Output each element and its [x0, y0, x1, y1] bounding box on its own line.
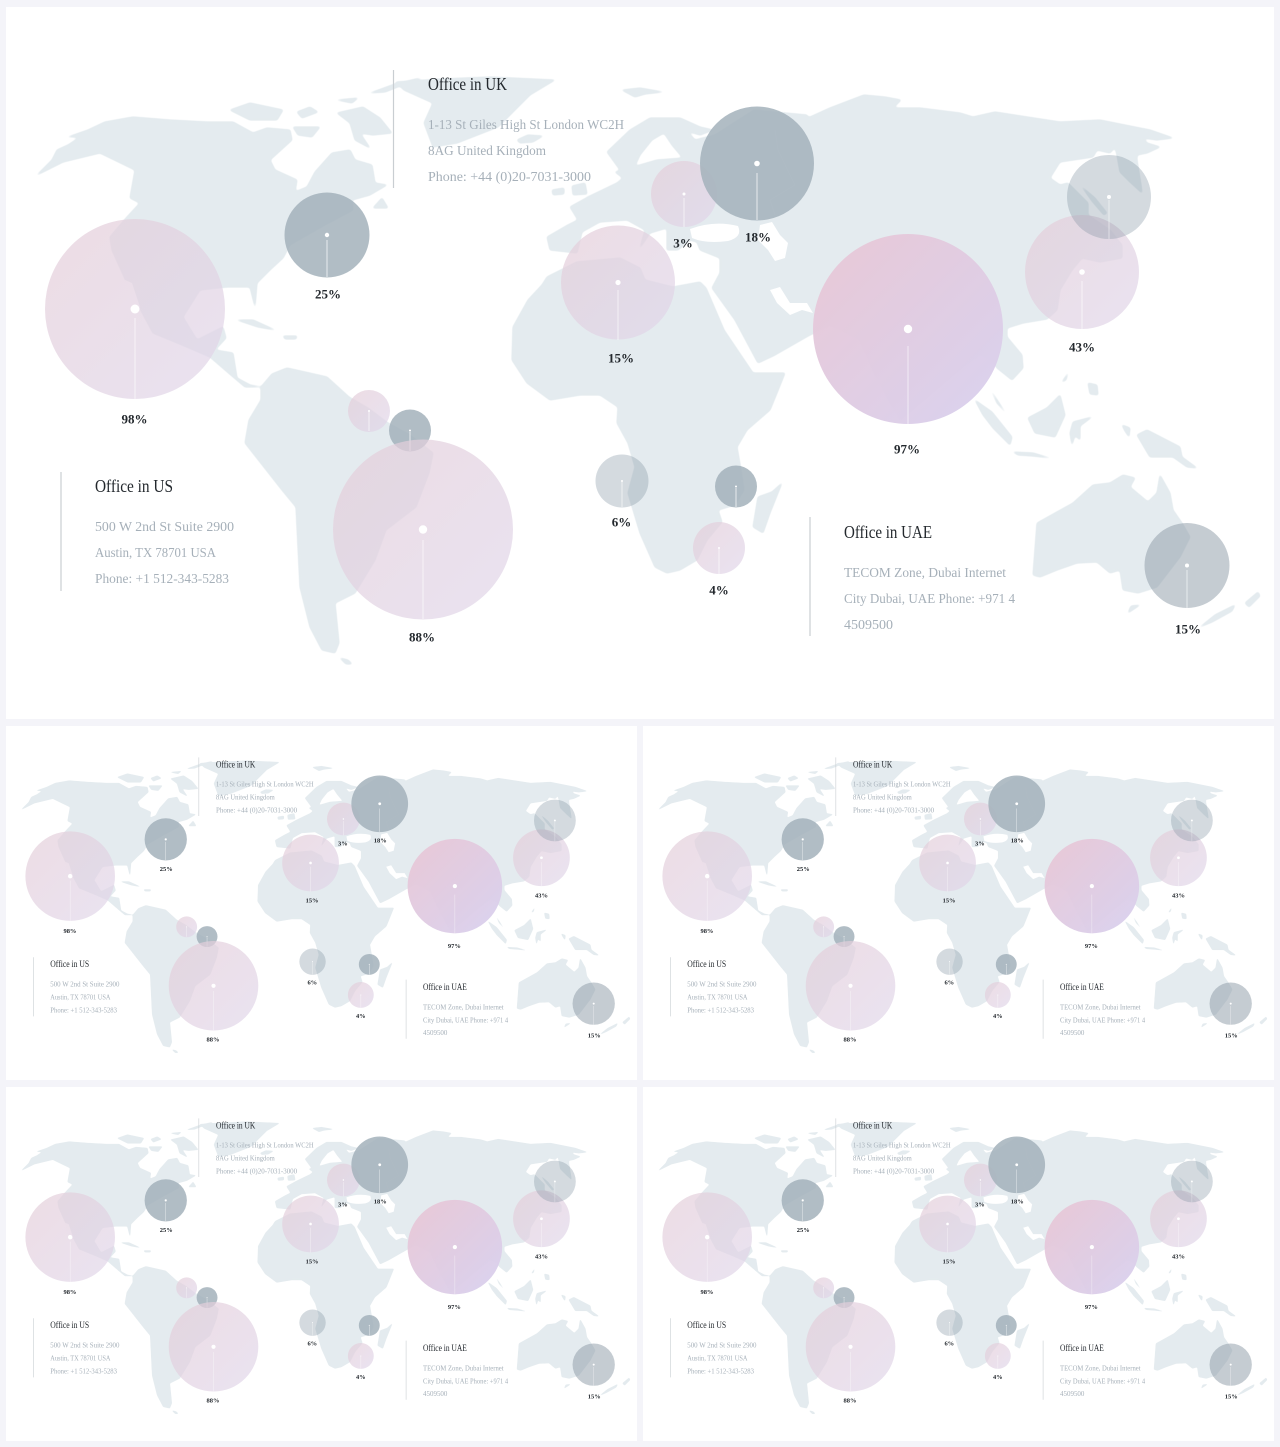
- thumbnail office block: UK: [199, 1118, 314, 1177]
- label 3%: 3%: [673, 236, 693, 250]
- thumbnail office block: UAE: 4509500: [1060, 1029, 1085, 1037]
- thumbnail office block: US: Office in US: [687, 1320, 726, 1330]
- thumbnail percentage labels: 97%: [1085, 943, 1098, 950]
- bubbles group: [45, 106, 1230, 620]
- thumbnail map: [658, 1122, 1267, 1414]
- bubble: 15% Africa north: [561, 226, 675, 340]
- bubble: 6%: [596, 454, 648, 508]
- thumbnail bubbles: [25, 775, 615, 1031]
- thumbnail office block: US: 500 W 2nd St Suite 2900: [687, 1342, 757, 1350]
- office block: US: Austin, TX 78701 USA: [95, 546, 217, 561]
- thumbnail percentage labels: [63, 838, 601, 1043]
- thumbnail office block: US: Phone: +1 512-343-5283: [687, 1367, 754, 1375]
- office block: US: Phone: +1 512-343-5283: [95, 572, 229, 587]
- thumbnail office block: US: Austin, TX 78701 USA: [50, 993, 111, 1001]
- thumbnail percentage labels: 98%: [700, 1289, 713, 1296]
- thumbnail office block: UAE: [1043, 1341, 1146, 1400]
- label 97%: 97%: [894, 442, 920, 456]
- thumbnail percentage labels: 15%: [306, 898, 319, 905]
- label 4%: 4%: [709, 582, 729, 598]
- thumbnail percentage labels: 3%: [338, 1202, 348, 1209]
- thumbnail percentage labels: 6%: [307, 1340, 317, 1347]
- thumbnail percentage labels: 88%: [207, 1397, 219, 1404]
- office block: UAE: [810, 517, 1015, 636]
- thumbnail office block: UAE: Office in UAE: [423, 982, 467, 992]
- label 88%: 88%: [409, 630, 435, 644]
- thumbnail office block: UAE: 4509500: [423, 1029, 448, 1037]
- thumbnail office block: UK: 8AG United Kingdom: [216, 1155, 275, 1163]
- panel: thumbnail bottom right: [643, 1087, 1274, 1441]
- panel: thumbnail bottom left: [6, 1087, 637, 1441]
- office block: UK: 8AG United Kingdom: [428, 144, 546, 159]
- office block: US: 500 W 2nd St Suite 2900: [95, 520, 234, 535]
- thumbnail percentage labels: [63, 1199, 601, 1404]
- thumbnail office block: US: Office in US: [50, 959, 89, 969]
- thumbnail office block: UK: Phone: +44 (0)20-7031-3000: [216, 807, 298, 815]
- thumbnail office block: UAE: Office in UAE: [1060, 982, 1104, 992]
- percentage labels: [122, 230, 1201, 644]
- thumbnail percentage labels: 6%: [307, 979, 317, 986]
- thumbnail office block: UK: Office in UK: [853, 1120, 893, 1130]
- thumbnail office block: US: Office in US: [687, 959, 726, 969]
- thumbnail percentage labels: 18%: [1011, 1199, 1024, 1206]
- thumbnail percentage labels: 88%: [844, 1397, 856, 1404]
- thumbnail content: [658, 757, 1267, 1053]
- thumbnail map: [658, 761, 1267, 1053]
- bubble: 43%: [1025, 215, 1139, 329]
- world map: [37, 77, 1260, 664]
- thumbnail percentage labels: 25%: [160, 866, 173, 873]
- thumbnail percentage labels: [700, 1199, 1238, 1404]
- thumbnail office block: UK: [836, 757, 951, 816]
- thumbnail percentage labels: 97%: [1085, 1304, 1098, 1311]
- thumbnail percentage labels: 43%: [1172, 892, 1185, 899]
- thumbnail percentage labels: 15%: [1225, 1032, 1238, 1039]
- bubble: east Asia grey: [1067, 155, 1151, 239]
- thumbnail percentage labels: 3%: [975, 841, 985, 848]
- thumbnail office block: UK: Office in UK: [853, 759, 893, 769]
- thumbnail office block: UK: Phone: +44 (0)20-7031-3000: [853, 807, 935, 815]
- thumbnail percentage labels: 18%: [374, 838, 387, 845]
- thumbnail office block: UK: Office in UK: [216, 759, 256, 769]
- thumbnail percentage labels: 98%: [63, 1289, 76, 1296]
- thumbnail office block: UK: 1-13 St Giles High St London WC2H: [853, 1142, 951, 1150]
- thumbnail percentage labels: 88%: [207, 1036, 219, 1043]
- panel: thumbnail top right: [643, 726, 1274, 1080]
- thumbnail office block: UAE: City Dubai, UAE Phone: +971 4: [423, 1016, 509, 1024]
- thumbnail office block: US: [670, 957, 757, 1016]
- bubble: small grey South America: [389, 410, 431, 452]
- thumbnail percentage labels: 18%: [1011, 838, 1024, 845]
- thumbnail percentage labels: 3%: [338, 841, 348, 848]
- thumbnail map: [21, 761, 630, 1053]
- thumbnail office block: UAE: [406, 1341, 509, 1400]
- thumbnail office block: UK: 8AG United Kingdom: [853, 1155, 912, 1163]
- thumbnail office block: US: 500 W 2nd St Suite 2900: [50, 981, 120, 989]
- office block: UAE: City Dubai, UAE Phone: +971 4: [844, 592, 1015, 607]
- thumbnail office block: US: 500 W 2nd St Suite 2900: [687, 981, 757, 989]
- thumbnail bubbles: [662, 1136, 1252, 1392]
- thumbnail percentage labels: 15%: [943, 898, 956, 905]
- office block: UK: Phone: +44 (0)20-7031-3000: [428, 170, 591, 185]
- thumbnail office block: UAE: TECOM Zone, Dubai Internet: [1060, 1364, 1141, 1372]
- thumbnail office block: UAE: City Dubai, UAE Phone: +971 4: [423, 1377, 509, 1385]
- bubble: 97%: [813, 234, 1003, 424]
- thumbnail office block: US: Austin, TX 78701 USA: [687, 1354, 748, 1362]
- office block: US: Office in US: [95, 476, 173, 496]
- thumbnail percentage labels: 98%: [63, 928, 76, 935]
- bubble: 3%: [651, 161, 717, 227]
- thumbnail percentage labels: 18%: [374, 1199, 387, 1206]
- thumbnail office block: UK: 1-13 St Giles High St London WC2H: [853, 781, 951, 789]
- thumbnail office block: UAE: Office in UAE: [423, 1343, 467, 1353]
- thumbnail content: [658, 1118, 1267, 1414]
- thumbnail office block: UK: Phone: +44 (0)20-7031-3000: [853, 1168, 935, 1176]
- panel: thumbnail top left: [6, 726, 637, 1080]
- thumbnail office block: UK: [199, 757, 314, 816]
- bubble: small grey Africa east: [715, 466, 757, 508]
- thumbnail percentage labels: 15%: [588, 1393, 601, 1400]
- office block: UAE: 4509500: [844, 618, 893, 633]
- thumbnail percentage labels: 4%: [993, 1374, 1003, 1381]
- thumbnail office block: UAE: City Dubai, UAE Phone: +971 4: [1060, 1377, 1146, 1385]
- thumbnail office block: UK: 1-13 St Giles High St London WC2H: [216, 1142, 314, 1150]
- thumbnail office block: US: [670, 1318, 757, 1377]
- label 15% Australia: 15%: [1175, 622, 1201, 636]
- thumbnail office block: US: Austin, TX 78701 USA: [50, 1354, 111, 1362]
- office block: UAE: TECOM Zone, Dubai Internet: [844, 566, 1006, 581]
- thumbnail percentage labels: 43%: [1172, 1253, 1185, 1260]
- office block: UK: 1-13 St Giles High St London WC2H: [428, 118, 624, 133]
- thumbnail office block: UAE: 4509500: [1060, 1390, 1085, 1398]
- thumbnail office block: US: Phone: +1 512-343-5283: [687, 1006, 754, 1014]
- thumbnail office block: US: [33, 957, 120, 1016]
- thumbnail office block: UAE: [406, 980, 509, 1039]
- label 6%: 6%: [612, 514, 631, 530]
- thumbnail office block: US: Phone: +1 512-343-5283: [50, 1367, 117, 1375]
- thumbnail percentage labels: 6%: [944, 979, 954, 986]
- office block: UAE: Office in UAE: [844, 522, 932, 542]
- thumbnail office block: UK: 8AG United Kingdom: [853, 794, 912, 802]
- thumbnail percentage labels: 15%: [943, 1259, 956, 1266]
- thumbnail office block: US: Austin, TX 78701 USA: [687, 993, 748, 1001]
- bubble: 98%: [45, 219, 225, 399]
- thumbnail percentage labels: 6%: [944, 1340, 954, 1347]
- thumbnail percentage labels: [700, 838, 1238, 1043]
- office block: US: [61, 472, 234, 591]
- thumbnail percentage labels: 4%: [993, 1013, 1003, 1020]
- thumbnail percentage labels: 43%: [535, 892, 548, 899]
- bubble: 25%: [284, 192, 370, 278]
- bubble: small pink South America: [348, 390, 390, 432]
- thumbnail percentage labels: 25%: [797, 1227, 810, 1234]
- thumbnail office block: UAE: City Dubai, UAE Phone: +971 4: [1060, 1016, 1146, 1024]
- thumbnail percentage labels: 25%: [160, 1227, 173, 1234]
- label 98%: 98%: [122, 412, 148, 426]
- bubble: 4%: [693, 522, 745, 574]
- label 43%: 43%: [1069, 340, 1095, 354]
- thumbnail percentage labels: 97%: [448, 1304, 461, 1311]
- thumbnail percentage labels: 3%: [975, 1202, 985, 1209]
- thumbnail content: [21, 757, 630, 1053]
- thumbnail percentage labels: 97%: [448, 943, 461, 950]
- thumbnail office block: UK: Office in UK: [216, 1120, 256, 1130]
- thumbnail office block: US: Office in US: [50, 1320, 89, 1330]
- thumbnail office block: US: Phone: +1 512-343-5283: [50, 1006, 117, 1014]
- thumbnail office block: UK: [836, 1118, 951, 1177]
- thumbnail content: [21, 1118, 630, 1414]
- thumbnail office block: US: [33, 1318, 120, 1377]
- label 18%: 18%: [745, 230, 771, 244]
- thumbnail percentage labels: 15%: [588, 1032, 601, 1039]
- bubble: 18%: [700, 106, 814, 220]
- thumbnail office block: UAE: [1043, 980, 1146, 1039]
- bubble: 88%: [333, 440, 513, 620]
- thumbnail percentage labels: 15%: [306, 1259, 319, 1266]
- thumbnail office block: UAE: 4509500: [423, 1390, 448, 1398]
- thumbnail office block: UK: Phone: +44 (0)20-7031-3000: [216, 1168, 298, 1176]
- thumbnail office block: UAE: TECOM Zone, Dubai Internet: [423, 1364, 504, 1372]
- label 25%: 25%: [315, 286, 341, 302]
- thumbnail percentage labels: 43%: [535, 1253, 548, 1260]
- thumbnail office block: UK: 1-13 St Giles High St London WC2H: [216, 781, 314, 789]
- thumbnail office block: UAE: Office in UAE: [1060, 1343, 1104, 1353]
- thumbnail office block: UAE: TECOM Zone, Dubai Internet: [423, 1003, 504, 1011]
- thumbnail percentage labels: 15%: [1225, 1393, 1238, 1400]
- thumbnail percentage labels: 25%: [797, 866, 810, 873]
- office block: UK: Office in UK: [428, 74, 507, 94]
- panel: main world map: [6, 7, 1274, 719]
- office block: UK: [394, 70, 624, 188]
- thumbnail office block: US: 500 W 2nd St Suite 2900: [50, 1342, 120, 1350]
- thumbnail bubbles: [662, 775, 1252, 1031]
- bubble: 15% Australia: [1144, 523, 1230, 608]
- thumbnail percentage labels: 88%: [844, 1036, 856, 1043]
- thumbnail percentage labels: 4%: [356, 1374, 366, 1381]
- thumbnail percentage labels: 4%: [356, 1013, 366, 1020]
- thumbnail map: [21, 1122, 630, 1414]
- thumbnail percentage labels: 98%: [700, 928, 713, 935]
- thumbnail office block: UK: 8AG United Kingdom: [216, 794, 275, 802]
- thumbnail bubbles: [25, 1136, 615, 1392]
- thumbnail office block: UAE: TECOM Zone, Dubai Internet: [1060, 1003, 1141, 1011]
- label 15%: 15%: [608, 350, 634, 366]
